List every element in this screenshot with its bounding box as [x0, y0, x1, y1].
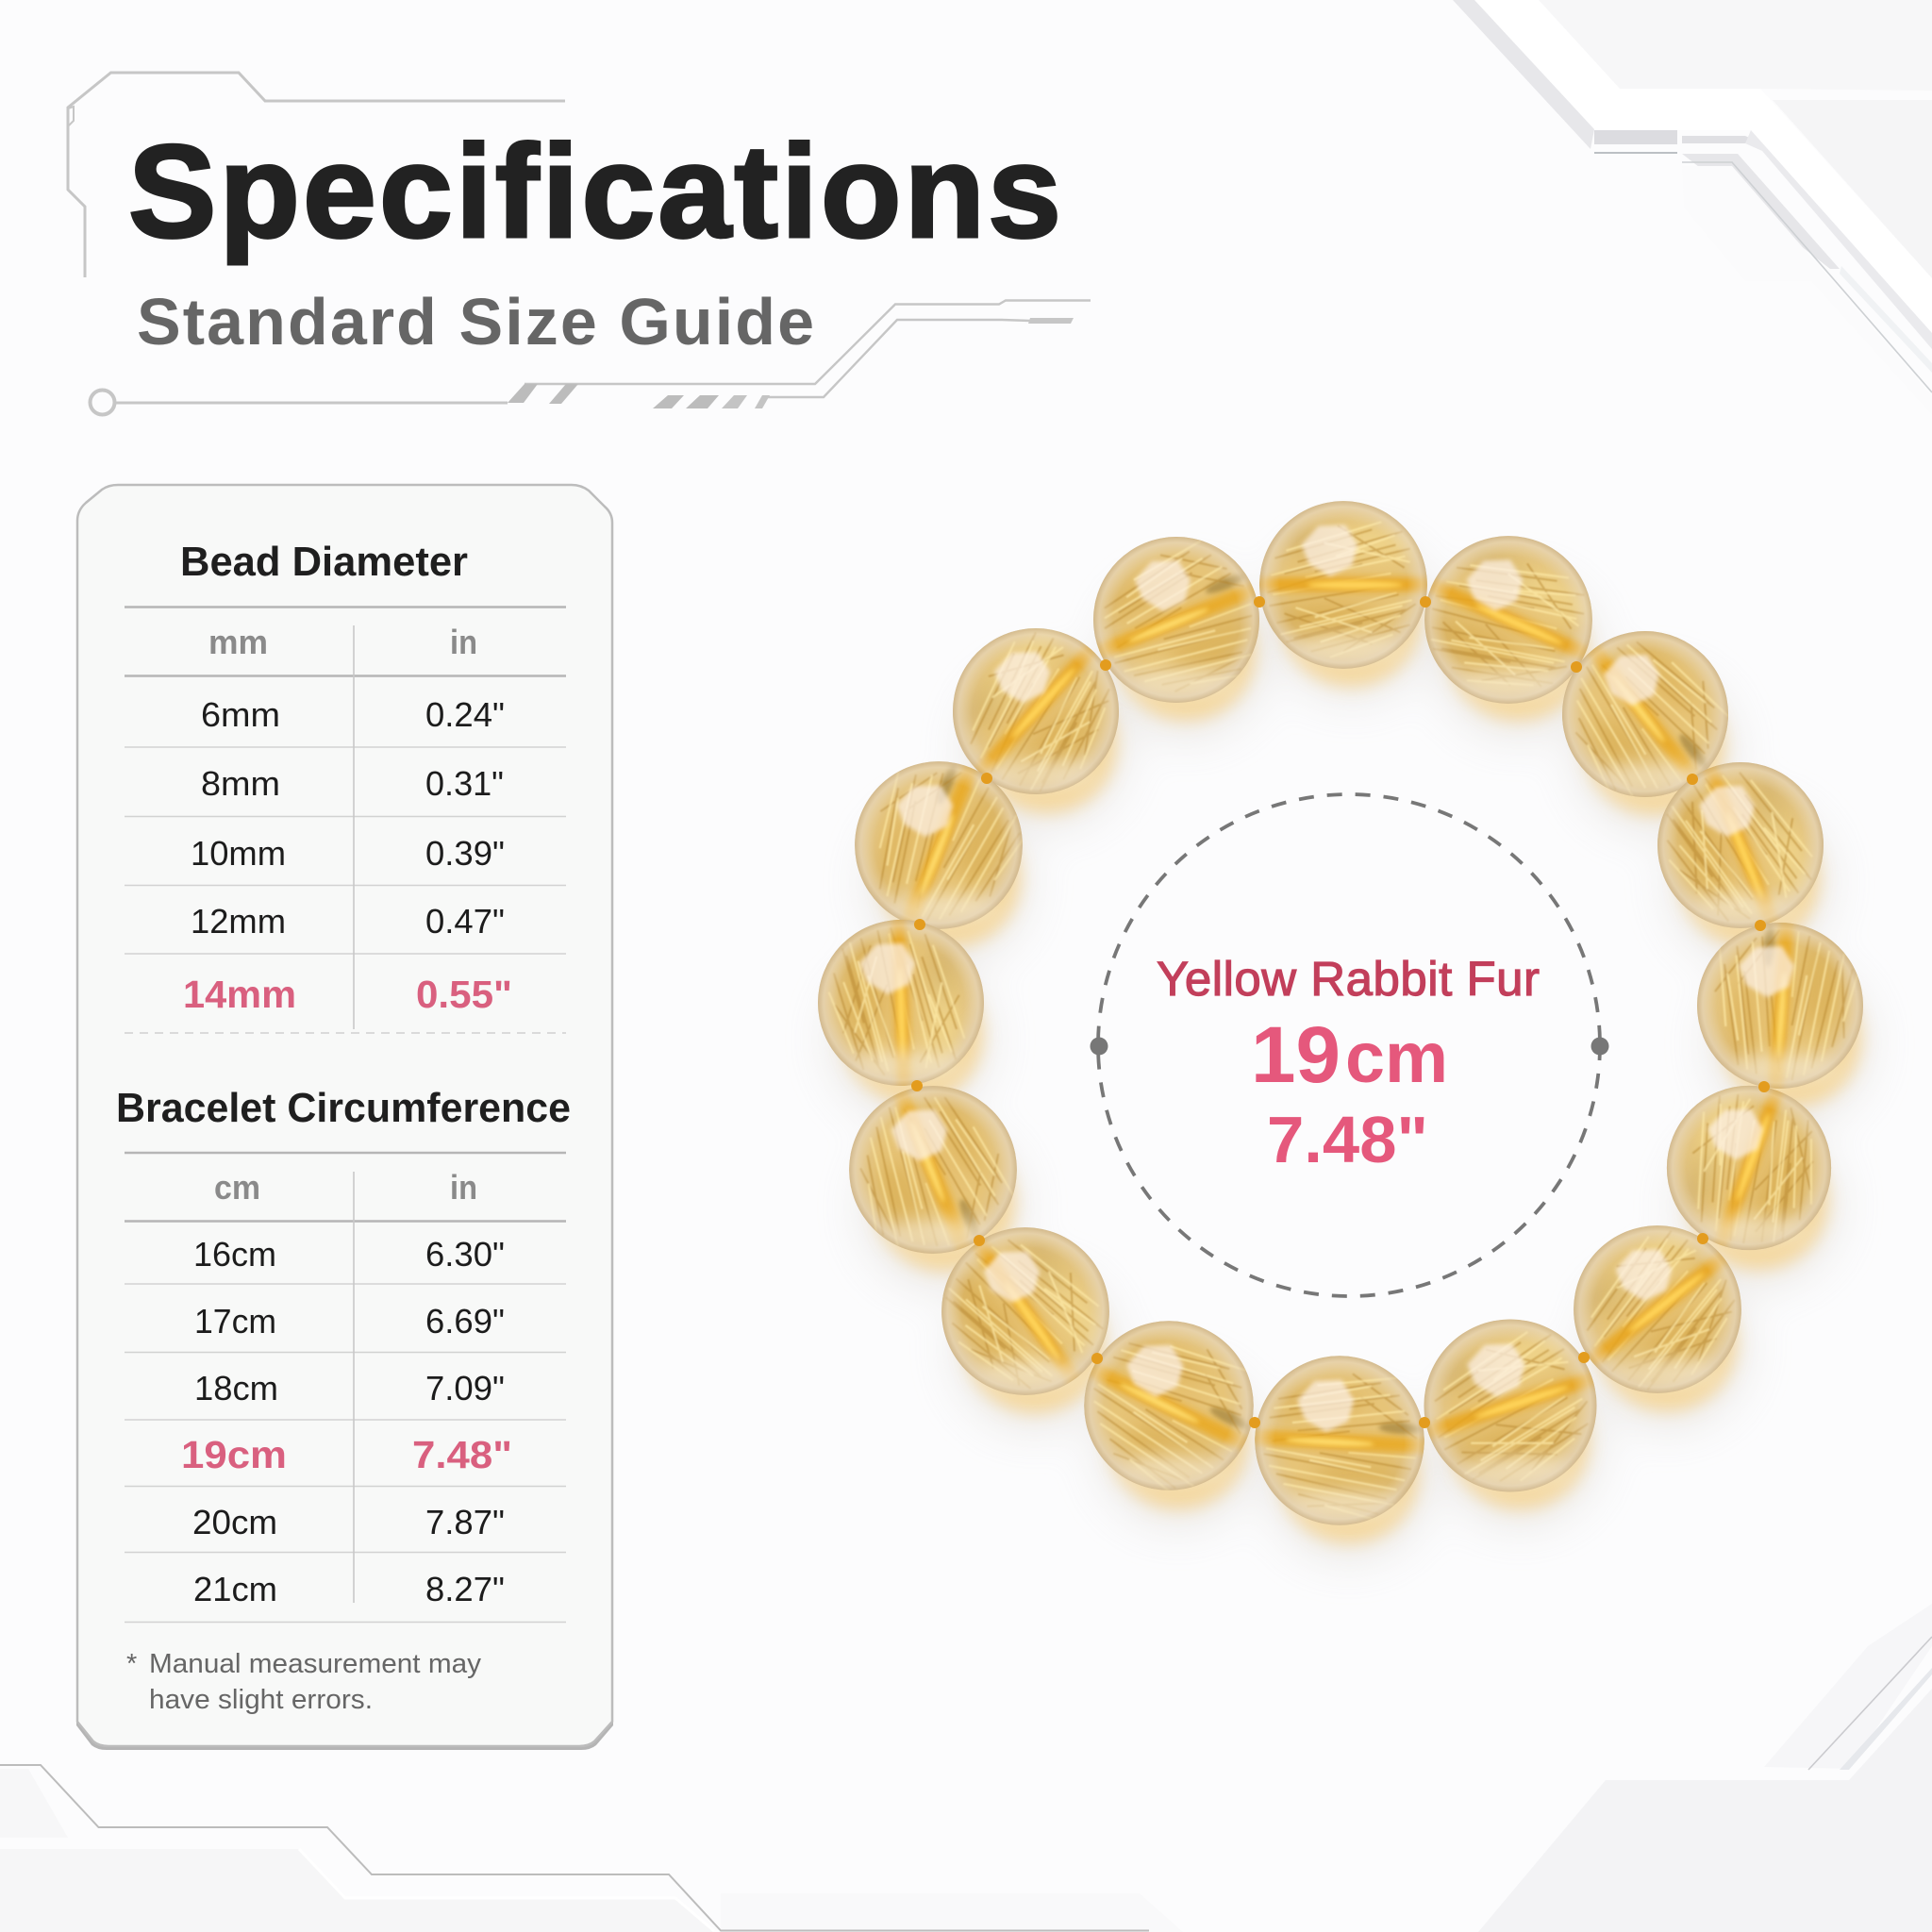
dashed size ring	[1091, 794, 1609, 1296]
table: bracelet circumference: 6.69"	[425, 1302, 505, 1341]
decor: bottom-left stepped panels	[0, 1765, 1183, 1932]
decor: top-right corner panels	[1453, 0, 1932, 415]
bead joints	[911, 596, 1770, 1428]
bead 11	[1666, 1085, 1832, 1251]
footnote: *	[126, 1649, 137, 1679]
heading: bead diameter: Bead Diameter	[180, 539, 468, 585]
table: bracelet circumference: 18cm	[194, 1369, 278, 1407]
bead 4	[953, 628, 1119, 794]
table: bead diameter: 0.47"	[425, 902, 505, 941]
table: bead diameter: 14mm	[183, 973, 296, 1016]
table: bracelet circumference	[116, 1085, 571, 1623]
table: bracelet circumference: 7.09"	[425, 1369, 505, 1407]
bead 12	[941, 1227, 1109, 1395]
table: bead diameter: in	[450, 623, 477, 661]
table: bracelet circumference: 17cm	[194, 1302, 276, 1341]
table: bracelet circumference: cm	[214, 1168, 260, 1207]
bead 1	[1256, 501, 1431, 669]
title: Specifications	[128, 117, 1061, 265]
bead 6	[855, 761, 1023, 929]
table: bracelet circumference: 20cm	[192, 1503, 277, 1541]
title frame lines	[68, 73, 1091, 415]
table: bead diameter: 12mm	[191, 902, 286, 941]
bead 5	[1562, 631, 1728, 797]
size cm: 19	[1251, 1010, 1341, 1099]
table: bracelet circumference: 7.87"	[425, 1503, 505, 1541]
table: bracelet circumference: 6.30"	[425, 1235, 505, 1274]
table: bead diameter: 0.39"	[425, 834, 505, 873]
size cm: cm	[1345, 1018, 1448, 1098]
decor: bottom-right panels	[1478, 1604, 1932, 1932]
panel: size tables	[76, 485, 613, 1750]
table: bead diameter: 8mm	[201, 764, 280, 803]
bead 14	[1084, 1321, 1254, 1491]
table: bracelet circumference: 19cm	[181, 1433, 287, 1476]
bead 8	[818, 914, 984, 1092]
table: bracelet circumference: 16cm	[193, 1235, 276, 1274]
bead 10	[849, 1086, 1017, 1254]
table: bracelet circumference: 8.27"	[425, 1570, 505, 1608]
center label	[1157, 952, 1540, 1176]
size cm	[1251, 1010, 1448, 1099]
bead 13	[1574, 1225, 1741, 1393]
ring dot left	[1091, 1038, 1108, 1055]
bead shadows	[830, 539, 1870, 1559]
footnote: have slight errors.	[149, 1685, 373, 1715]
bead 15	[1424, 1319, 1596, 1492]
table: bead diameter: mm	[208, 623, 268, 661]
table: bead diameter: 0.24"	[425, 695, 505, 734]
table: bead diameter: 0.31"	[425, 764, 504, 803]
table: bead diameter: 10mm	[191, 834, 286, 873]
footnote: Manual measurement may	[149, 1649, 481, 1679]
table: bead diameter	[125, 539, 566, 1033]
bracelet	[818, 501, 1863, 1525]
bead 7	[1657, 762, 1824, 928]
size inches: 7.48"	[1267, 1103, 1428, 1176]
table: bracelet circumference: in	[450, 1168, 477, 1207]
footnote	[126, 1649, 481, 1715]
table: bead diameter: 0.55"	[416, 973, 512, 1016]
subtitle: Standard Size Guide	[137, 285, 814, 358]
table: bracelet circumference: 21cm	[193, 1570, 277, 1608]
heading: bracelet circumference: Bracelet Circumference	[116, 1085, 571, 1131]
bead 2	[1093, 537, 1259, 703]
product name: Yellow Rabbit Fur	[1157, 952, 1540, 1006]
bead 16	[1247, 1356, 1431, 1525]
bead 3	[1424, 536, 1592, 704]
bead 9	[1697, 914, 1863, 1097]
table: bead diameter: 6mm	[201, 695, 280, 734]
table: bracelet circumference: 7.48"	[412, 1433, 512, 1476]
ring dot right	[1591, 1038, 1609, 1055]
